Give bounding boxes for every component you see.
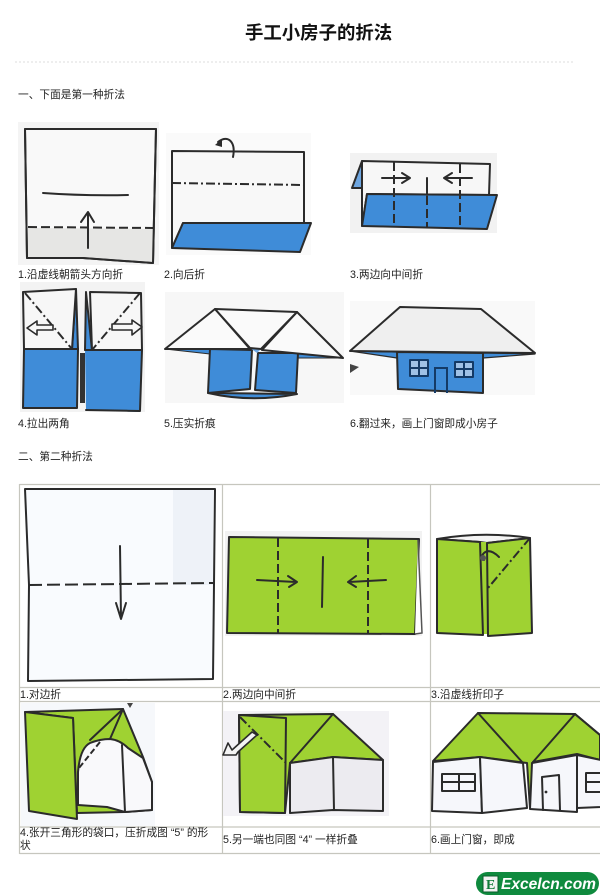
icon: left window [410,360,428,376]
caption table 4 second line: 状 [20,839,31,852]
panel: table step 1 fold [25,489,215,681]
panel: step 4 pull out corners [20,282,145,412]
heading: method one: 一、下面是第一种折法 [18,88,125,101]
caption table 3: 3.沿虚线折印子 [431,688,504,701]
icon: door [435,368,447,393]
caption 4: 4.拉出两角 [18,417,70,430]
icon: right window [455,362,473,377]
panel: table step 6 finished green house [432,713,600,813]
caption table 4: 4.张开三角形的袋口，压折成图 “5” 的形 [20,826,209,839]
caption table 6: 6.画上门窗，即成 [431,833,515,846]
caption 1: 1.沿虚线朝箭头方向折 [18,268,123,281]
panel: step 3 fold to center [350,153,497,233]
caption table 2: 2.两边向中间折 [223,688,296,701]
caption 6: 6.翻过来，画上门窗即成小房子 [350,417,498,430]
table grid [20,484,600,854]
caption table 5: 5.另一端也同图 “4” 一样折叠 [223,833,358,846]
logo: Excelcn.com [476,872,599,895]
panel: step 6 finished blue house [350,301,535,395]
title: 手工小房子的折法 [245,22,392,43]
panel: table step 3 crease [437,535,532,636]
panel: step 5 press creases [165,292,344,403]
caption 5: 5.压实折痕 [164,417,216,430]
heading: method two: 二、第二种折法 [18,450,93,463]
panel: table step 4 open pocket [21,703,155,826]
caption 3: 3.两边向中间折 [350,268,423,281]
caption 2: 2.向后折 [164,268,205,281]
logo: Excelcn.com: Excelcn.com [501,876,596,893]
panel: step 2 fold back [166,133,311,255]
panel: table step 5 fold other end [223,711,389,816]
logo: Excelcn.com: E [486,878,495,893]
caption table 1: 1.对边折 [20,688,61,701]
icon: windows and door [442,773,600,810]
panel: table step 2 fold to center [225,531,422,636]
panel: step 1 fold up [18,122,159,265]
